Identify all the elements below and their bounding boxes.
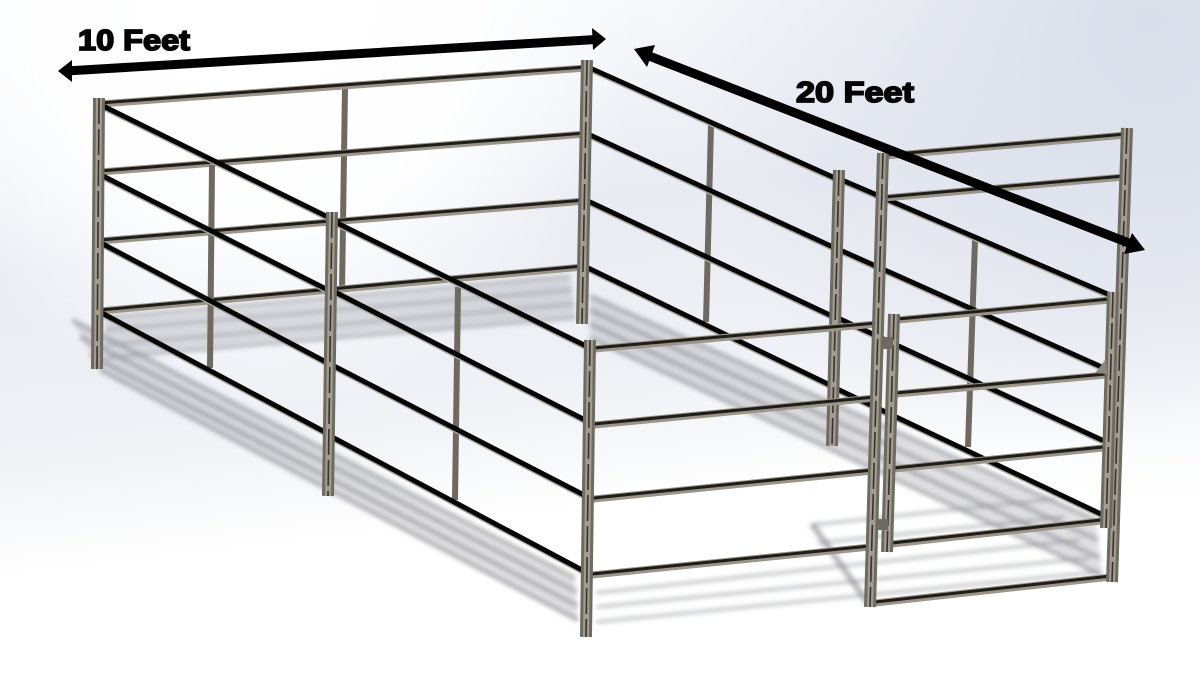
right end panel [870, 128, 1127, 607]
left side panel [100, 105, 586, 574]
back posts [582, 60, 839, 446]
label: 10 feet: 10 Feet [78, 25, 190, 57]
shadow: left side panel [72, 320, 578, 620]
label: 20 feet: 20 Feet [796, 77, 914, 109]
front corner post [586, 340, 590, 637]
left side posts [97, 98, 332, 496]
back left panel [100, 67, 586, 311]
front panel [592, 323, 877, 575]
shadow: back left panel [105, 276, 576, 358]
arrow: 10 feet [58, 28, 606, 82]
shadow: front and gate panels [596, 499, 1098, 622]
back right panel [586, 68, 1110, 518]
shadow: soft shadow bands [72, 276, 1102, 622]
arrow: 20 feet [634, 45, 1145, 254]
gate [877, 292, 1113, 552]
floor shadows [72, 276, 1102, 622]
shadow: right side panel [590, 296, 1102, 575]
